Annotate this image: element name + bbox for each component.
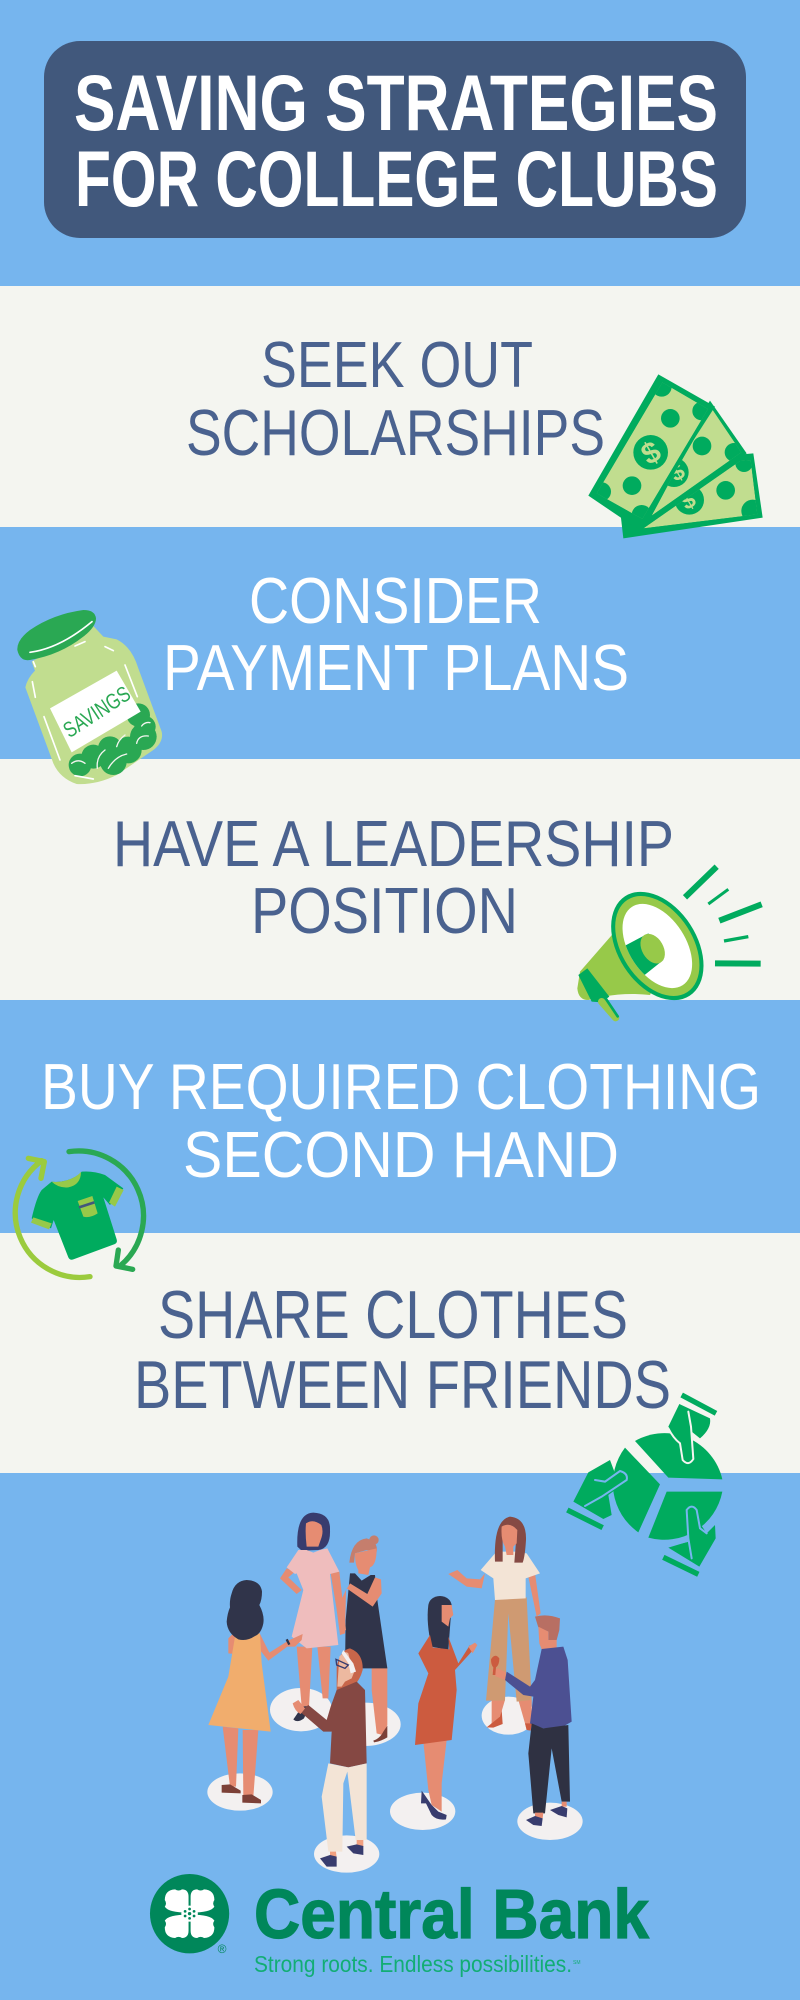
panel: leadership position band xyxy=(0,759,800,1000)
logo wordmark: Central Bank xyxy=(254,1875,649,1953)
panel: seek out scholarships band xyxy=(0,286,800,527)
icon: recycled t-shirt xyxy=(15,1151,144,1277)
logo tagline: Strong roots. Endless possibilities. xyxy=(254,1951,572,1977)
registered mark: ® xyxy=(218,1942,227,1956)
icon: megaphone xyxy=(577,867,762,1018)
icon: money bills: $ xyxy=(636,435,667,472)
woman in red dress xyxy=(415,1596,477,1820)
logo: Central Bank xyxy=(150,1874,649,1977)
heading: have a leadership position: POSITION xyxy=(251,874,518,947)
icon: money bills xyxy=(588,374,764,538)
panel: share clothes band xyxy=(0,1233,800,1473)
icon: money bills: $ xyxy=(665,458,689,487)
heading: share clothes between friends: BETWEEN FRIENDS xyxy=(134,1347,671,1423)
floor spots xyxy=(207,1688,583,1873)
panel: buy second hand band xyxy=(0,1000,800,1233)
title panel xyxy=(44,41,746,238)
heading: seek out scholarships: SCHOLARSHIPS xyxy=(186,396,605,469)
icon: money bills: $ xyxy=(676,486,700,515)
woman in peach dress xyxy=(208,1580,303,1803)
heading: buy required clothing second hand: SECOND HAND xyxy=(183,1118,619,1191)
title xyxy=(74,58,718,223)
icon: clothes sharing cycle xyxy=(567,1395,722,1574)
heading: share clothes between friends xyxy=(134,1277,671,1423)
man in blue sweater xyxy=(491,1615,572,1826)
man with glasses xyxy=(293,1648,367,1867)
service mark: SM xyxy=(573,1960,580,1966)
icon: savings jar: SAVINGS xyxy=(58,681,135,743)
illustration: group of people talking xyxy=(207,1513,583,1873)
panel: bottom blue band xyxy=(0,1473,800,2000)
heading: consider payment plans: CONSIDER xyxy=(249,564,542,637)
heading: seek out scholarships xyxy=(186,328,605,469)
woman in tan pants xyxy=(448,1517,541,1731)
heading: share clothes between friends: SHARE CLOTHES xyxy=(158,1277,628,1353)
woman in pink dress xyxy=(280,1513,346,1721)
heading: consider payment plans: PAYMENT PLANS xyxy=(163,631,629,704)
panel: top blue band xyxy=(0,0,800,286)
heading: seek out scholarships: SEEK OUT xyxy=(261,328,533,401)
icon: savings jar xyxy=(17,610,162,784)
panel: consider payment plans band xyxy=(0,527,800,759)
woman in black dress xyxy=(337,1535,387,1742)
heading: buy required clothing second hand xyxy=(41,1050,761,1191)
logo emblem xyxy=(150,1874,229,1953)
heading: have a leadership position: HAVE A LEADERSHIP xyxy=(113,807,674,880)
heading: have a leadership position xyxy=(113,807,674,947)
heading: consider payment plans xyxy=(163,564,629,704)
